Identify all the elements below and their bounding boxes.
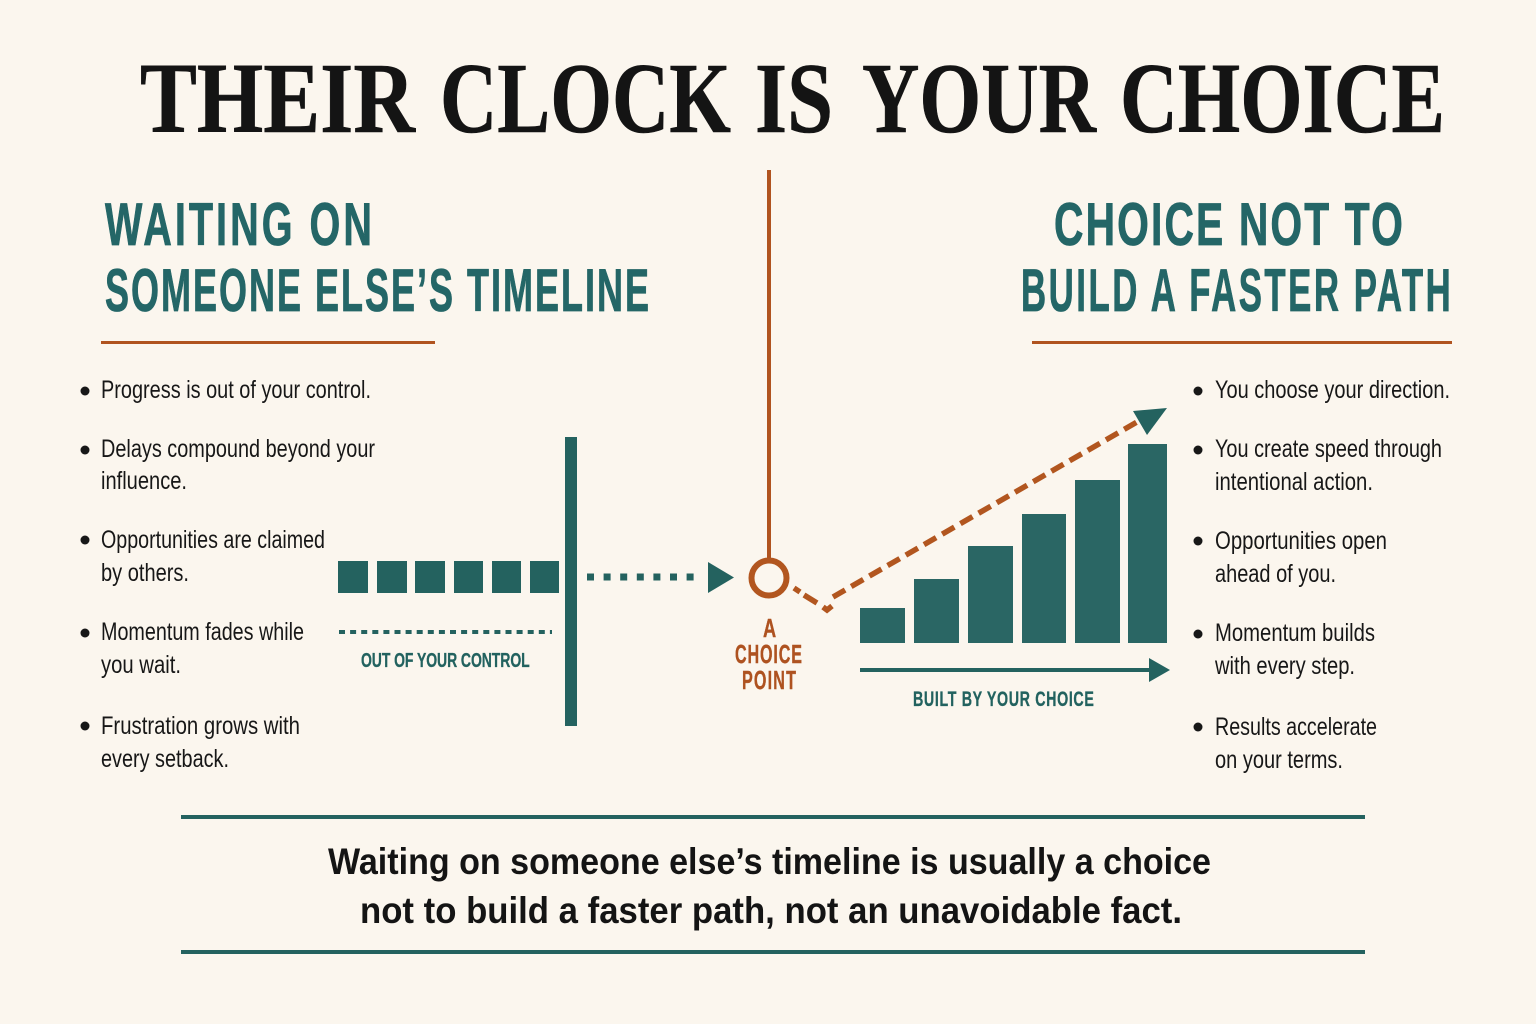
bullet list: waiting: Frustration grows with bbox=[101, 712, 300, 740]
label: built by your choice: BUILT BY YOUR CHOICE bbox=[913, 687, 1094, 711]
arrow: built by choice bbox=[860, 658, 1170, 682]
title bbox=[140, 42, 1445, 154]
heading: waiting bbox=[105, 191, 649, 324]
barrier bbox=[565, 437, 577, 726]
title: THEIR bbox=[140, 42, 416, 154]
centre vertical line bbox=[767, 170, 771, 562]
bullet list: choice: on your terms. bbox=[1215, 746, 1343, 774]
bullet list: waiting: you wait. bbox=[101, 651, 181, 679]
heading: waiting: WAITING ON bbox=[105, 191, 372, 258]
statement text: not to build a faster path, not an unavoidable fact. bbox=[360, 890, 1182, 931]
heading: choice: BUILD A FASTER PATH bbox=[1021, 258, 1451, 324]
bullet list: choice: Opportunities open bbox=[1215, 527, 1387, 555]
bullet list: choice: with every step. bbox=[1214, 652, 1355, 680]
bullet list: waiting: Opportunities are claimed bbox=[101, 526, 325, 554]
title: IS bbox=[755, 42, 833, 154]
label: a choice point: A bbox=[763, 614, 776, 643]
bullet list: waiting: every setback. bbox=[101, 745, 229, 773]
bullet list: waiting: Delays compound beyond your bbox=[101, 435, 375, 463]
dotted line: out of control bbox=[339, 630, 552, 634]
bottom statement bbox=[181, 815, 1365, 954]
bullet list: waiting: Momentum fades while bbox=[101, 618, 304, 646]
bullet list: waiting bbox=[80, 376, 375, 773]
label: a choice point: POINT bbox=[742, 665, 796, 695]
statement text: Waiting on someone else’s timeline is usually a choice bbox=[328, 841, 1211, 882]
bullet list: choice: You create speed through bbox=[1215, 435, 1442, 463]
bar chart: growth bbox=[860, 444, 1167, 643]
label: a choice point bbox=[735, 614, 802, 695]
bullet list: choice: ahead of you. bbox=[1215, 560, 1336, 588]
title: CHOICE bbox=[1120, 42, 1445, 154]
bullet list: choice: intentional action. bbox=[1215, 468, 1373, 496]
bullet list: choice: Results accelerate bbox=[1215, 713, 1377, 741]
bullet list: choice bbox=[1194, 376, 1450, 774]
choice point ring bbox=[752, 560, 786, 596]
bullet list: waiting: Progress is out of your control. bbox=[101, 376, 371, 404]
heading: waiting: SOMEONE ELSE’S TIMELINE bbox=[105, 258, 649, 324]
panel: waiting on someone else's timeline bbox=[80, 191, 734, 773]
bullet list: choice: Momentum builds bbox=[1215, 619, 1375, 647]
dotted arrow to choice point bbox=[587, 562, 734, 593]
panel: choice not to build a faster path bbox=[794, 191, 1452, 774]
bullet list: choice: You choose your direction. bbox=[1215, 376, 1450, 404]
title: YOUR bbox=[862, 42, 1097, 154]
heading: choice bbox=[1021, 191, 1451, 324]
bullet list: waiting: influence. bbox=[101, 467, 187, 495]
heading: choice: CHOICE NOT TO bbox=[1054, 191, 1403, 258]
choice point bbox=[735, 560, 802, 695]
label: a choice point: CHOICE bbox=[735, 639, 802, 669]
bullet list: waiting: by others. bbox=[101, 559, 189, 587]
dashed rising arrow bbox=[794, 408, 1167, 610]
label: out of your control: OUT OF YOUR CONTROL bbox=[361, 648, 530, 672]
statement text bbox=[328, 841, 1211, 931]
title: CLOCK bbox=[440, 42, 731, 154]
diagram: blocked squares bbox=[338, 561, 559, 593]
